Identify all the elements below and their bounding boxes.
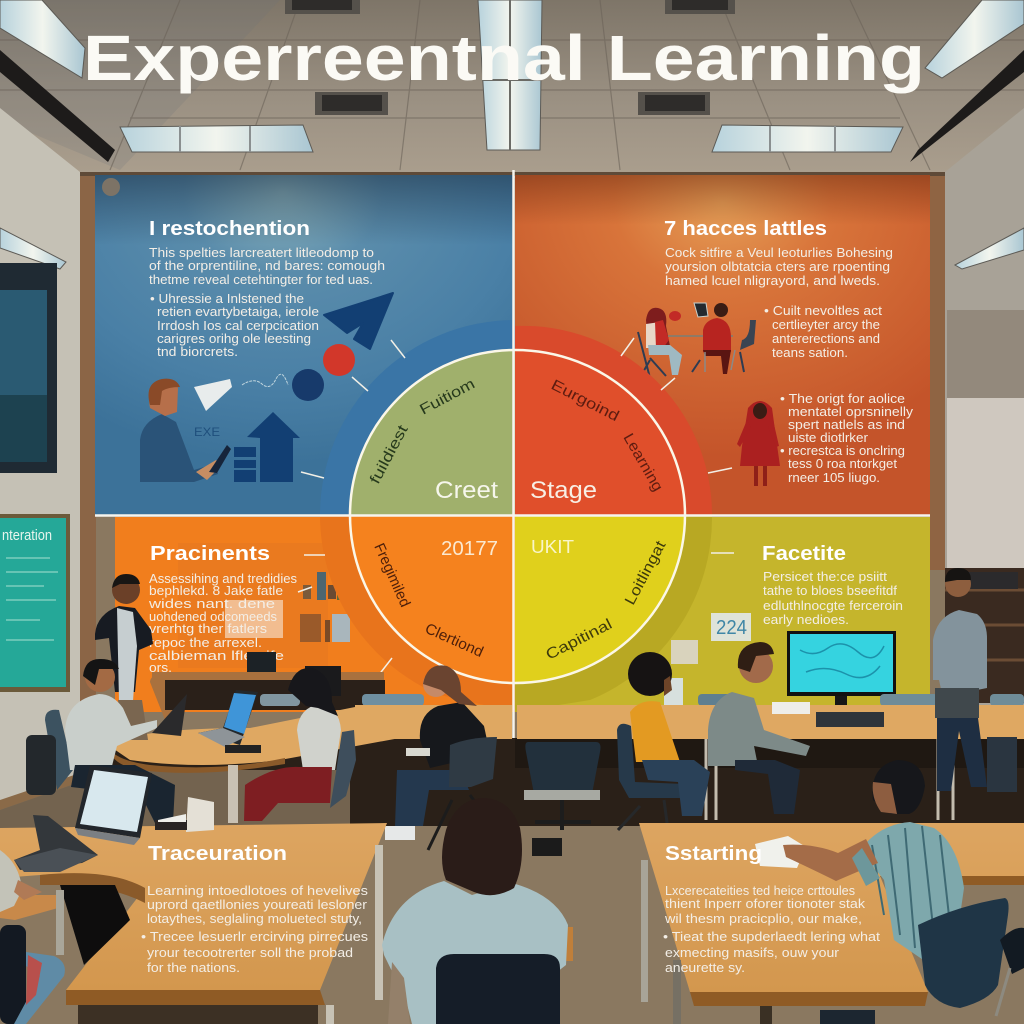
- illustration: two seated people: [638, 303, 756, 378]
- heading: red panel: 7 hacces lattles: [664, 218, 827, 240]
- text block: red panel second bullet: • recrestca is onclring: [780, 444, 905, 458]
- quadrant labels: Clertiond: [422, 620, 486, 661]
- text block: orange panel: repoc the arrexel.: [149, 636, 262, 650]
- text block: orange panel: calbieman lfles ife: [149, 649, 284, 663]
- text block: blue panel bullet: carigres orihg ole leesting: [157, 332, 311, 346]
- heading: blue panel: I restochention: [149, 218, 310, 240]
- text block: blue panel bullet: [150, 292, 319, 359]
- wall chalkboard: [0, 514, 70, 692]
- person: seated woman facing away with chair: [382, 798, 573, 1024]
- icon: navy arrow: [324, 293, 393, 349]
- card: 224: [711, 613, 751, 641]
- quadrant labels: Eurgoind: [548, 376, 622, 425]
- text block: near right table: • Tieat the supderlaedt lering what: [663, 930, 881, 944]
- quadrant labels: Stage: [530, 477, 597, 504]
- text block: near left table: yrour tecootrerter soll the probad: [147, 946, 353, 960]
- quadrant labels: Loitlingat: [622, 537, 670, 608]
- near laptops and items: [14, 765, 214, 872]
- text block: orange panel: Assessihing and tredidies: [149, 572, 297, 586]
- text block: red panel second bullet: spert natlels as ind: [788, 418, 905, 432]
- text block: blue panel intro: This spelties larcreatert litleodomp to: [149, 246, 374, 260]
- text block: near right table: wil thesm pracicplio, our make,: [664, 912, 862, 926]
- text block: red panel intro: yoursion olbtatcia cters are rpoenting: [665, 260, 890, 274]
- near right table: [639, 823, 1024, 1024]
- quadrant labels: Creet: [435, 477, 498, 504]
- panel: red-orange quadrant: [515, 175, 930, 515]
- text block: red panel first bullet: certlieyter arcy the: [772, 318, 880, 332]
- text block: orange panel: ors.: [149, 661, 172, 675]
- text block: red panel second bullet: uiste diotlrker: [788, 431, 868, 445]
- text block: near right table: [663, 884, 881, 975]
- text block: near left table: • Trecee lesuerlr ercirving pirrecues: [141, 930, 368, 944]
- text block: near right table: exmecting masifs, ouw your: [665, 946, 839, 960]
- icon: navy circle: [292, 369, 324, 401]
- icon: house and stack: [234, 412, 300, 482]
- inner circle: four quadrants: [350, 350, 685, 683]
- text block: orange panel: bephlekd. 8 Jake fatle: [149, 584, 283, 598]
- icon: window: [0, 263, 57, 473]
- circular diagram: [298, 320, 734, 712]
- text block: orange panel: wides nant. dene: [148, 597, 275, 611]
- heading: near left table: Traceuration: [148, 843, 287, 865]
- text block: olive panel: Persicet the:ce psiitt: [763, 570, 888, 584]
- text block: near left table: lotaythes, seglaling moluetecl stuty,: [147, 912, 362, 926]
- panel: blue quadrant: [95, 175, 513, 515]
- person: man in plaid shirt with chair: [783, 760, 1024, 1024]
- quadrant labels: fuildiest: [367, 421, 412, 487]
- panel dividers: [95, 170, 930, 1024]
- text block: near left table: Learning intoedlotoes of hevelives: [147, 884, 368, 898]
- bookshelf: [945, 568, 1024, 703]
- dark under-desk zone: [0, 738, 1024, 860]
- text block: olive panel: [763, 570, 903, 627]
- panel: orange quadrant: [115, 517, 513, 712]
- back tables: [108, 702, 1024, 823]
- text block: near right table: thient Inperr oforer tionoter stak: [665, 897, 866, 911]
- text block: red panel first bullet: antererections and: [772, 332, 880, 346]
- quadrant labels: [367, 375, 670, 664]
- person: man in grey shirt: [708, 642, 810, 814]
- heading: near right table: Sstarting: [665, 843, 762, 865]
- text block: red panel first bullet: teans sation.: [772, 346, 848, 360]
- text block: blue panel intro: [149, 246, 385, 287]
- quadrant labels: Fregimiled: [370, 541, 414, 610]
- text block: red panel second bullet: mentatel oprsninelly: [788, 405, 914, 419]
- text block: blue panel intro: of the orprentiline, nd bares: comough: [149, 259, 385, 273]
- text block: red panel first bullet: [764, 304, 883, 360]
- text block: near left table: [141, 884, 368, 975]
- text block: near right table: Lxcerecateities ted heice crttoules: [665, 884, 855, 898]
- connector ticks: [298, 338, 734, 676]
- text block: red panel second bullet: [780, 392, 914, 485]
- text block: near left table: uprord qaetllonies youreati lesloner: [147, 898, 367, 912]
- icon: white paper plane: [194, 379, 232, 411]
- near left table: [0, 823, 387, 1024]
- text block: red panel first bullet: • Cuilt nevoltles act: [764, 304, 883, 318]
- text block: near right table: aneurette sy.: [665, 961, 745, 975]
- text block: blue panel bullet: retien evartybetaiga, ierole: [157, 305, 319, 319]
- illustration: standing woman in red: [737, 401, 780, 486]
- text block: orange panel: [148, 572, 297, 675]
- back desk with standing presenter's table: [150, 652, 1024, 720]
- person: standing man in suit: [95, 574, 153, 740]
- icon: person with phone: [140, 379, 231, 482]
- text block: red panel second bullet: tess 0 roa ntorkget: [788, 457, 898, 471]
- heading: olive panel: Facetite: [762, 543, 846, 565]
- small poster: [664, 678, 683, 706]
- icon: books on shelf: [300, 572, 350, 642]
- panel: olive-yellow quadrant: [515, 517, 930, 712]
- text block: blue panel bullet: • Uhressie a Inlstened the: [150, 292, 304, 306]
- quadrant labels: Capitinal: [543, 616, 615, 664]
- text block: red panel intro: hamed lcuel nligrayord, and lweds.: [665, 274, 880, 288]
- outer ring: four quadrants: [320, 320, 712, 712]
- ceiling lights and vents: [0, 0, 1024, 269]
- person: seated left edge: [0, 850, 65, 1024]
- quadrant labels: UKIT: [531, 537, 574, 557]
- text block: red panel second bullet: • The origt for aolice: [780, 392, 905, 406]
- text block: red panel intro: [665, 246, 893, 288]
- text block: near left table: for the nations.: [147, 961, 240, 975]
- text block: red panel second bullet: rneer 105 liugo.: [788, 471, 880, 485]
- note card: [671, 640, 698, 664]
- text block: olive panel: tathe to bloes bseefitdf: [763, 584, 898, 598]
- empty chair: [524, 742, 600, 856]
- monitor: [787, 631, 896, 710]
- person: seated man with laptop: [26, 659, 187, 823]
- quadrant labels: Fuitiom: [417, 375, 478, 419]
- person: woman in black top: [385, 665, 500, 850]
- card: 224: 224: [716, 617, 747, 639]
- text block: blue panel bullet: tnd biorcrets.: [157, 345, 238, 359]
- title: Experreentnal Learning: [83, 22, 925, 94]
- icon: red circle: [323, 344, 355, 376]
- heading: orange panel: Pracinents: [150, 543, 270, 565]
- text block: orange panel: uohdened odcomeeds: [149, 610, 277, 624]
- person: standing man right: [933, 568, 1017, 792]
- text block: blue panel bullet: Irrdosh Ios cal cerpcication: [157, 319, 319, 333]
- label: EXE: EXE: [194, 425, 220, 439]
- wall chalkboard: nteration: [2, 527, 52, 544]
- text block: blue panel intro: thetme reveal cetehtingter for ted uas.: [149, 273, 373, 287]
- text block: olive panel: early nedioes.: [763, 613, 849, 627]
- text block: red panel intro: Cock sitfire a Veul Ieoturlies Bohesing: [665, 246, 893, 260]
- quadrant labels: Learning: [620, 430, 666, 494]
- person: curly hair woman: [617, 652, 710, 830]
- text block: olive panel: edluthlnocgte ferceroin: [763, 599, 903, 613]
- person: woman with laptop: [198, 668, 356, 821]
- text block: orange panel: vrerhtg ther fatlers: [149, 622, 267, 636]
- quadrant labels: 20177: [441, 538, 498, 560]
